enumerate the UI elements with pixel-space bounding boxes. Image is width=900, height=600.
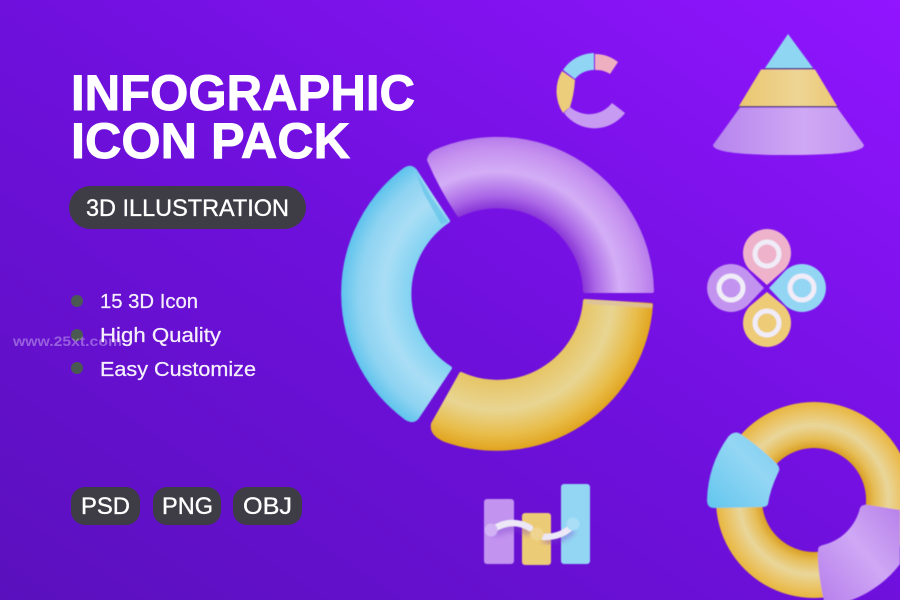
petal: purple bbox=[707, 264, 764, 312]
segment: purple bbox=[429, 139, 652, 291]
tier: blue bbox=[765, 34, 813, 68]
segment: purple bbox=[564, 103, 625, 128]
knob: right bbox=[566, 518, 580, 530]
rings bbox=[719, 242, 814, 335]
bar: yellow bbox=[522, 513, 551, 565]
petal: yellow bbox=[743, 292, 791, 347]
feature list: Easy Customize bbox=[100, 359, 256, 381]
petal: blue bbox=[769, 264, 826, 312]
segment: blue bbox=[563, 53, 594, 79]
format badges: PNG bbox=[162, 493, 213, 520]
connector bbox=[495, 523, 572, 537]
small segmented ring icon bbox=[556, 53, 625, 128]
feature list bbox=[71, 291, 256, 381]
watermark: www.25xt.com bbox=[12, 333, 122, 349]
segment: pink bbox=[595, 54, 618, 74]
bar: purple bbox=[484, 499, 514, 564]
bar: blue bbox=[561, 484, 590, 564]
badge: 3D illustration bbox=[69, 186, 306, 229]
knob: left bbox=[484, 524, 498, 536]
title bbox=[71, 65, 415, 169]
tier: yellow bbox=[739, 70, 837, 106]
badge: 3D illustration: 3D ILLUSTRATION bbox=[86, 195, 289, 222]
format badges: OBJ bbox=[243, 493, 292, 520]
segment: blue bbox=[707, 432, 779, 508]
format badges bbox=[71, 487, 302, 525]
format badges: PSD bbox=[81, 493, 130, 520]
segment: yellow bbox=[433, 301, 651, 449]
flower diagram icon bbox=[707, 229, 826, 347]
ring: yellow bbox=[716, 402, 900, 598]
bar chart icon bbox=[484, 484, 590, 565]
title: INFOGRAPHIC bbox=[71, 65, 415, 121]
pyramid icon bbox=[713, 34, 864, 155]
feature list: 15 3D Icon bbox=[100, 291, 198, 313]
main donut chart bbox=[343, 139, 652, 449]
knob: middle bbox=[530, 528, 544, 540]
segment: yellow bbox=[556, 71, 575, 113]
segment: blue bbox=[343, 168, 450, 420]
tier: purple bbox=[713, 108, 864, 155]
title: ICON PACK bbox=[71, 113, 350, 169]
feature list: High Quality bbox=[100, 325, 221, 347]
cropped donut chart bbox=[707, 402, 900, 600]
segment: purple bbox=[818, 505, 900, 600]
petal: pink bbox=[743, 229, 791, 285]
